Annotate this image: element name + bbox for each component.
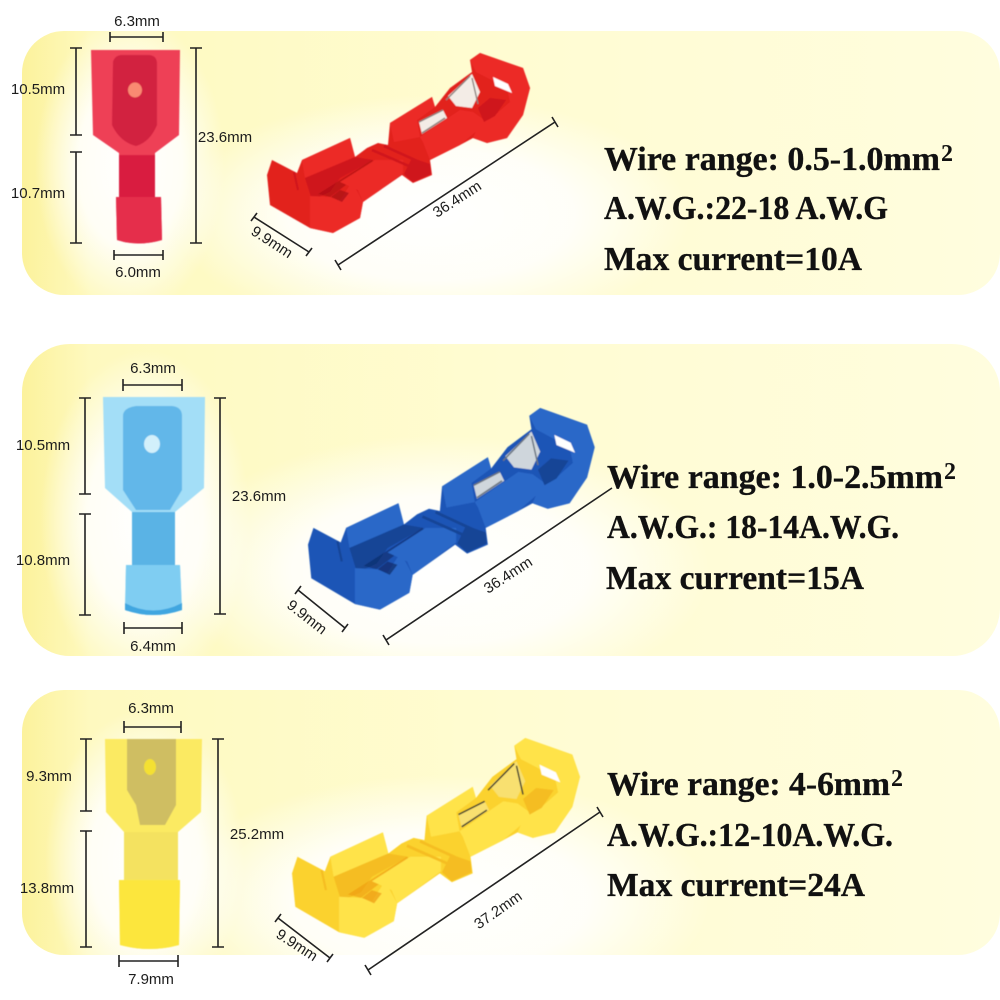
dimensions: blue T-tap connector: 9.9mm	[283, 597, 330, 638]
text: red specifications: 2	[941, 141, 953, 167]
panel: red connector row	[22, 15, 1000, 335]
icon: blue female terminal	[103, 397, 205, 615]
icon: red T-tap connector	[267, 53, 530, 233]
icon: blue T-tap connector	[308, 408, 595, 610]
panel: yellow connector row	[22, 690, 1000, 1000]
dimensions: red female terminal: 10.7mm	[11, 185, 65, 202]
icon: yellow female terminal	[105, 739, 202, 949]
dimensions: yellow T-tap connector	[273, 807, 603, 975]
dimensions: yellow female terminal: 13.8mm	[20, 880, 74, 897]
dimensions: red T-tap connector: 36.4mm	[430, 178, 485, 221]
text: yellow specifications: A.W.G.:12-10A.W.G.	[607, 817, 893, 854]
dimensions: yellow T-tap connector: 37.2mm	[471, 888, 525, 933]
text: blue specifications	[606, 459, 956, 597]
panel: blue connector row	[22, 344, 1000, 705]
dimensions: yellow female terminal: 25.2mm	[230, 826, 284, 843]
dimensions: yellow female terminal: 6.3mm	[128, 700, 174, 717]
dimensions: yellow female terminal	[20, 700, 284, 988]
dimensions: yellow female terminal: 9.3mm	[26, 768, 72, 785]
text: blue specifications: A.W.G.: 18-14A.W.G.	[607, 509, 899, 546]
text: red specifications: Max current=10A	[604, 241, 862, 278]
text: red specifications: A.W.G.:22-18 A.W.G	[604, 190, 888, 227]
dimensions: blue female terminal	[16, 360, 286, 655]
dimensions: yellow female terminal: 7.9mm	[128, 971, 174, 988]
dimensions: red female terminal: 6.3mm	[114, 13, 160, 30]
text: yellow specifications: Wire range: 4-6mm	[607, 766, 890, 803]
text: yellow specifications: 2	[891, 766, 903, 792]
dimensions: blue female terminal: 10.8mm	[16, 552, 70, 569]
dimensions: red T-tap connector	[248, 117, 558, 270]
dimensions: blue T-tap connector	[283, 488, 612, 645]
dimensions: red female terminal: 23.6mm	[198, 129, 252, 146]
text: blue specifications: Max current=15A	[606, 560, 864, 597]
text: red specifications: Wire range: 0.5-1.0mm	[604, 141, 940, 178]
dimensions: red T-tap connector: 9.9mm	[248, 223, 296, 262]
text: red specifications	[604, 141, 953, 278]
dimensions: blue female terminal: 6.3mm	[130, 360, 176, 377]
text: yellow specifications	[607, 766, 903, 904]
icon: yellow T-tap connector	[292, 738, 580, 938]
dimensions: blue female terminal: 6.4mm	[130, 638, 176, 655]
dimensions: red female terminal	[11, 13, 252, 281]
text: blue specifications: 2	[944, 459, 956, 485]
dimensions: blue female terminal: 23.6mm	[232, 488, 286, 505]
dimensions: blue T-tap connector: 36.4mm	[481, 554, 536, 597]
icon: red female terminal	[91, 50, 180, 244]
dimensions: blue female terminal: 10.5mm	[16, 437, 70, 454]
text: yellow specifications: Max current=24A	[607, 867, 865, 904]
text: blue specifications: Wire range: 1.0-2.5mm	[607, 459, 943, 496]
dimensions: red female terminal: 6.0mm	[115, 264, 161, 281]
dimensions: yellow T-tap connector: 9.9mm	[273, 926, 321, 965]
dimensions: red female terminal: 10.5mm	[11, 81, 65, 98]
